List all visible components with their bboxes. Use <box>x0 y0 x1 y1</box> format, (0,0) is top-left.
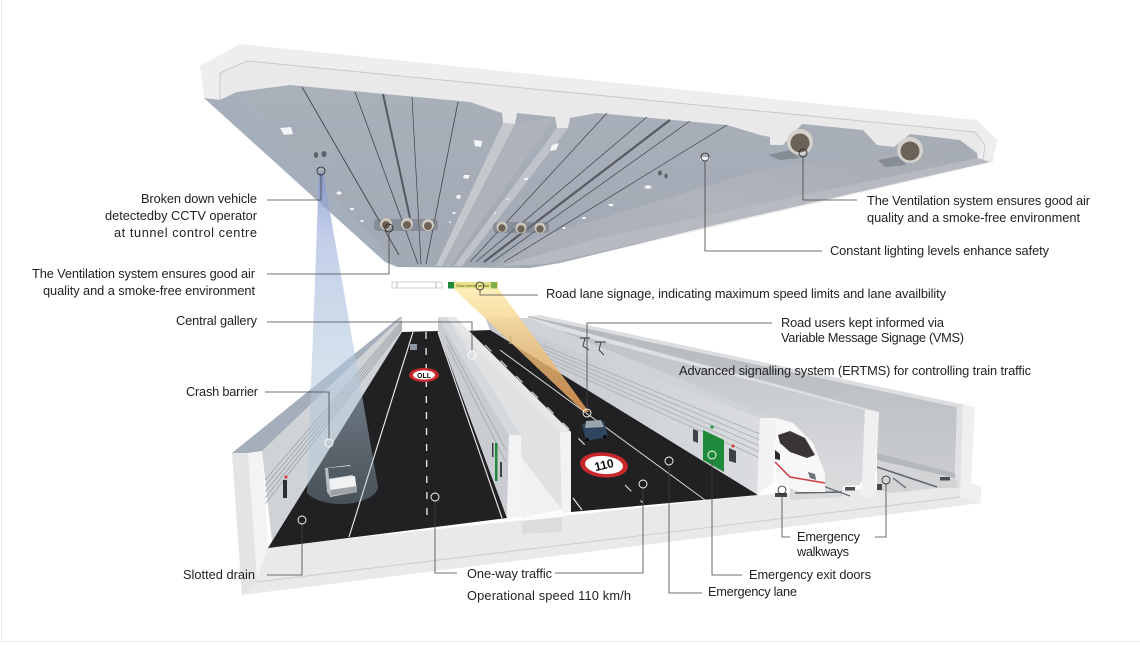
road 2 markings <box>485 345 705 510</box>
leader: walkway left <box>778 486 790 537</box>
label: broken down vehicle: at tunnel control centre <box>114 225 257 240</box>
leader: slotted drain <box>267 516 306 575</box>
gallery floor <box>521 457 562 517</box>
CCTV cameras <box>314 151 668 178</box>
road 1 markings <box>349 332 502 537</box>
top tunnel slab <box>200 44 997 268</box>
label: constant lighting: Constant lighting levels enhance safety <box>830 243 1050 258</box>
leader: operational speed <box>555 480 647 573</box>
central gallery <box>438 317 571 534</box>
label: emergency exit doors: Emergency exit doors <box>749 567 871 582</box>
leader: walkway right <box>875 476 890 537</box>
label: ventilation right <box>867 193 1091 225</box>
label: operational speed: Operational speed 110 km/h <box>467 588 631 603</box>
soffit lights <box>280 127 710 229</box>
label: crash barrier: Crash barrier <box>186 384 259 399</box>
label: emergency walkways <box>796 529 861 559</box>
leader: one-way traffic <box>431 493 457 573</box>
right wall end cap <box>507 435 522 518</box>
rear wall <box>528 316 957 473</box>
road 1 and its walls <box>232 317 522 595</box>
label: ventilation left: The Ventilation system ensures good air <box>32 266 256 281</box>
label: variable message signage: Variable Message Signage (VMS) <box>781 330 964 345</box>
blue vehicle <box>582 420 608 441</box>
middle rail wall <box>528 322 865 490</box>
left wall end cap <box>232 453 257 595</box>
middle wall end cap <box>860 410 879 497</box>
end cap of road 2 right wall <box>757 418 777 495</box>
label: broken down vehicle: detectedby CCTV operator <box>105 208 258 223</box>
speed sign 110 upside down far: OLL <box>417 373 432 380</box>
leader: crash barrier <box>265 392 333 447</box>
leader lines and markers <box>265 149 890 593</box>
leader: emergency lane <box>665 457 702 593</box>
road 1 right wall <box>438 317 509 518</box>
label: emergency lane: Emergency lane <box>708 584 797 599</box>
speed sign 110 on road <box>579 450 629 480</box>
emergency exit door <box>693 425 736 472</box>
label: central gallery: Central gallery <box>176 313 258 328</box>
lower lit ribbon of soffit <box>490 140 978 268</box>
rear wall end caps <box>955 405 963 490</box>
distant car <box>410 344 417 350</box>
label: variable message signage: Road users kept informed via <box>781 315 945 330</box>
gallery inner wall <box>447 317 562 510</box>
left wall inner face <box>262 317 402 542</box>
road 2 surface <box>465 330 758 512</box>
speed sign 110 on road: 110 <box>593 456 615 474</box>
slab outer concrete face <box>200 44 997 268</box>
label: ERTMS signalling: Advanced signalling system (ERTMS) for controlling train traffic <box>679 363 1032 378</box>
wall stripes <box>500 328 760 458</box>
label: broken down vehicle: Broken down vehicle <box>141 191 257 206</box>
gallery service duct <box>522 513 562 534</box>
label: broken down vehicle <box>105 191 258 240</box>
roadside door and panels <box>283 443 502 498</box>
label: road lane signage: Road lane signage, indicating maximum speed limits and lane availbility <box>546 286 947 301</box>
road 2 right wall <box>485 317 760 495</box>
leader: constant lighting <box>701 153 822 251</box>
catenary gantries <box>580 338 606 355</box>
central rib <box>436 123 515 266</box>
label: slotted drain: Slotted drain <box>183 567 255 582</box>
right ventilation tubes <box>768 129 923 167</box>
rail tunnels <box>528 315 981 503</box>
leader: broken down vehicle <box>267 167 325 200</box>
leader: ventilation right <box>799 149 857 200</box>
middle ventilation tubes <box>493 222 549 234</box>
label: ventilation left <box>32 266 256 298</box>
leader: variable message signage <box>583 323 772 417</box>
top of road 1 right wall <box>438 317 521 435</box>
overhead road signs <box>392 282 498 288</box>
left wall stripes <box>265 321 402 504</box>
yellow signal beam to vehicle <box>453 288 589 412</box>
leader: emergency exit doors <box>708 451 742 575</box>
far rail floor and tracks <box>877 453 958 493</box>
green lane sign: Slow tunnel ahead <box>456 283 489 288</box>
tunnel base slab <box>232 451 981 595</box>
blank gantry panel <box>392 282 442 288</box>
label: emergency walkways: Emergency <box>797 529 861 544</box>
label: emergency walkways: walkways <box>796 544 849 559</box>
leader: central gallery <box>267 322 476 359</box>
ceiling soffit <box>237 85 978 268</box>
ceiling left flank <box>204 92 397 267</box>
label: one-way traffic: One-way traffic <box>467 566 553 581</box>
broken down white car <box>325 465 357 497</box>
speed sign 110 upside down far <box>409 368 439 382</box>
leader: ventilation left <box>267 224 393 274</box>
label: ventilation right: quality and a smoke-free environment <box>867 210 1080 225</box>
label: ventilation left: quality and a smoke-free environment <box>43 283 255 298</box>
far pedestrian <box>509 336 512 344</box>
leader: road lane signage <box>476 282 538 295</box>
near rail floor and steps <box>775 470 860 500</box>
road 1 surface <box>268 331 507 548</box>
blue CCTV beam <box>307 172 378 504</box>
label: variable message signage <box>781 315 964 345</box>
joint lines <box>302 87 727 264</box>
road 2 and its walls <box>465 317 777 512</box>
gallery right end cap <box>560 432 571 513</box>
label: ventilation right: The Ventilation system ensures good air <box>867 193 1091 208</box>
high-speed train <box>775 418 825 492</box>
left ventilation tubes <box>374 218 438 231</box>
